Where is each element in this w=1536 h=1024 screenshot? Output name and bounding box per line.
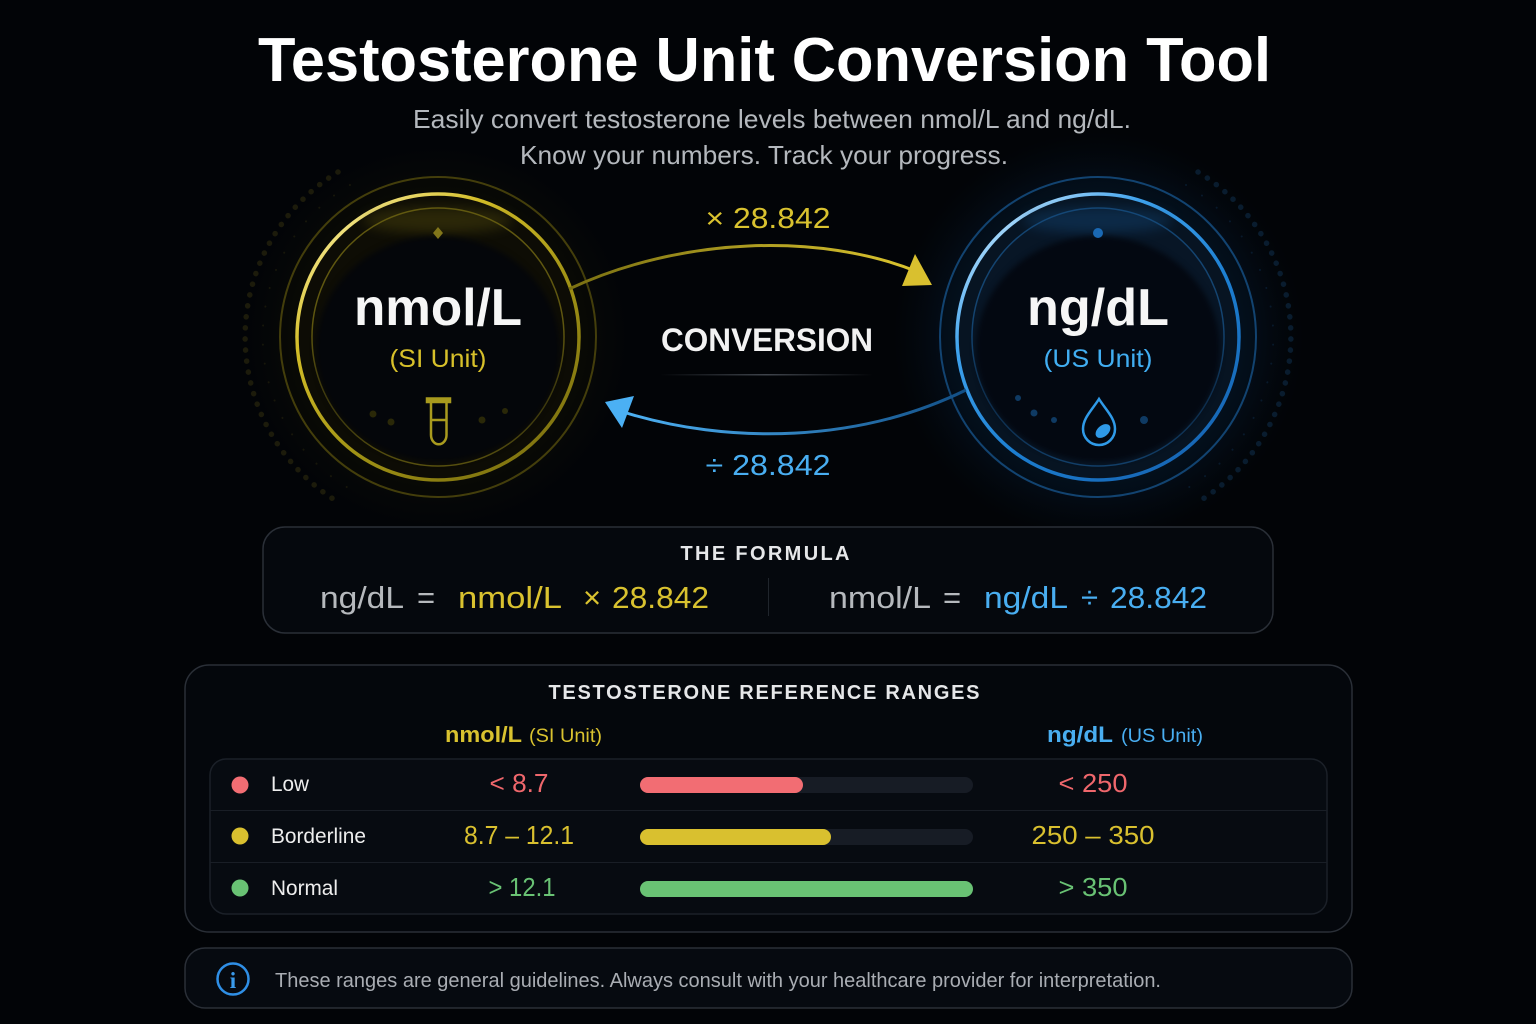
arrow: ng/dL to nmol/L [605, 390, 966, 434]
row: normal: > 350 [1058, 872, 1128, 902]
icon: info: i [230, 968, 237, 993]
subtitle [413, 104, 1131, 170]
formula: to nmol/L: ÷ [1081, 580, 1098, 615]
formula: to nmol/L [829, 580, 1207, 615]
formula: to ng/dL: × [583, 580, 601, 615]
formula: to ng/dL: nmol/L [458, 580, 562, 615]
unit label: nmol/L [354, 279, 522, 337]
subtitle: Know your numbers. Track your progress. [520, 140, 1008, 170]
subtitle: Easily convert testosterone levels between nmol/L and ng/dL. [413, 104, 1131, 134]
marker dot [433, 227, 443, 239]
title: Testosterone Unit Conversion Tool [258, 26, 1271, 95]
column header: ng/dL: ng/dL [1047, 722, 1113, 747]
unit sublabel: (US Unit) [1044, 345, 1152, 373]
formula: to ng/dL: = [417, 580, 435, 615]
conversion heading: CONVERSION [661, 322, 873, 358]
unit sublabel: (SI Unit) [390, 345, 486, 373]
formula heading: THE FORMULA [680, 543, 850, 565]
formula: to ng/dL: 28.842 [612, 580, 709, 615]
formula: to ng/dL: ng/dL [320, 580, 404, 615]
column header: nmol/L: (SI Unit) [529, 726, 602, 747]
row: low: < 250 [1058, 768, 1128, 798]
column header: nmol/L [445, 722, 602, 747]
icon: water drop [1083, 399, 1115, 445]
formula: to nmol/L: ng/dL [984, 580, 1068, 615]
formula: to nmol/L: 28.842 [1110, 580, 1207, 615]
row: normal [232, 872, 1128, 902]
column header: ng/dL [1047, 722, 1203, 747]
divide label: ÷ 28.842 [706, 450, 830, 482]
unit label: ng/dL [1027, 279, 1169, 337]
panel: disclaimer note [185, 948, 1352, 1008]
unit dial: nmol/L [245, 172, 596, 502]
column header: nmol/L: nmol/L [445, 722, 522, 747]
row: borderline: Borderline [271, 825, 366, 848]
ranges heading: TESTOSTERONE REFERENCE RANGES [548, 682, 980, 704]
unit dial: ng/dL [940, 172, 1291, 502]
row: borderline: 250 – 350 [1032, 820, 1154, 850]
panel: formula [263, 527, 1273, 633]
row: low: < 8.7 [490, 768, 548, 798]
marker dot [1093, 228, 1103, 238]
row: low: Low [271, 773, 310, 796]
formula: to nmol/L: nmol/L [829, 580, 931, 615]
icon: info [218, 964, 248, 994]
row: low [232, 768, 1128, 798]
formula: to nmol/L: = [943, 580, 961, 615]
row: normal: Normal [271, 877, 338, 900]
formula: to ng/dL [320, 580, 709, 615]
column header: ng/dL: (US Unit) [1121, 726, 1203, 747]
row: normal: > 12.1 [488, 872, 556, 902]
icon: test tube [427, 398, 450, 444]
arrow: nmol/L to ng/dL [569, 246, 932, 289]
row: borderline [232, 820, 1154, 850]
disclaimer text: These ranges are general guidelines. Always consult with your healthcare provider for interpretation. [275, 969, 1161, 992]
row: borderline: 8.7 – 12.1 [464, 820, 574, 850]
multiply label: × 28.842 [706, 203, 830, 235]
panel: reference ranges [185, 665, 1352, 932]
